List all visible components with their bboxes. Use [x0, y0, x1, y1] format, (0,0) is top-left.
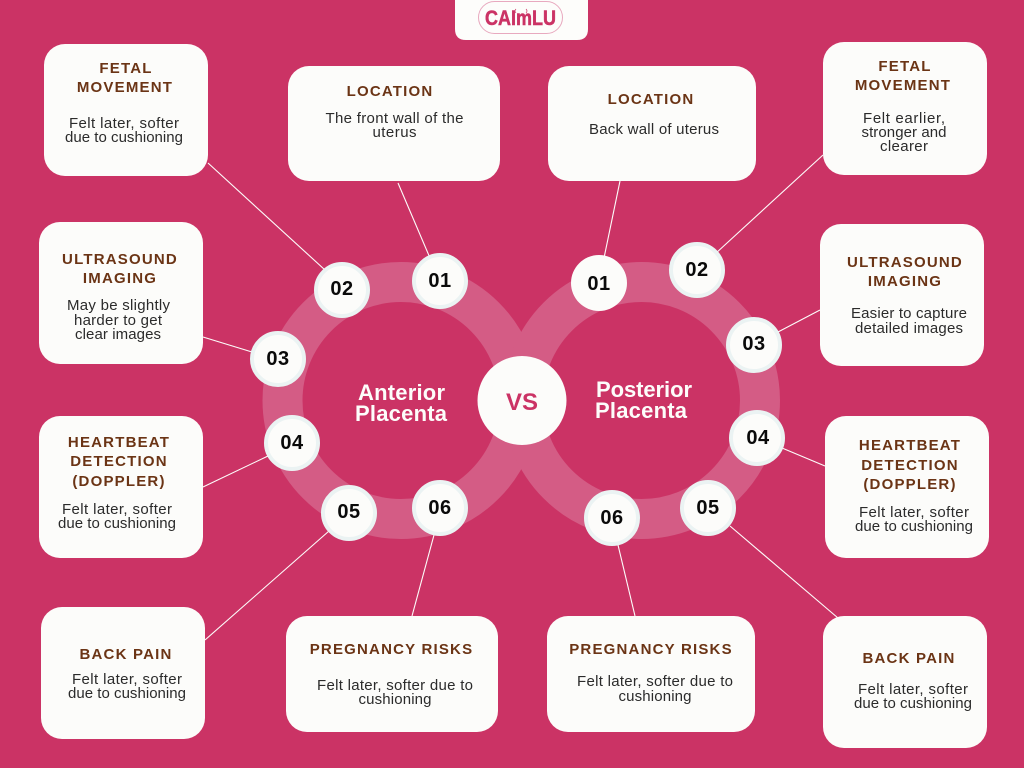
panel: posterior back pain: [823, 616, 987, 748]
panel: anterior fetal movement: MOVEMENT: [77, 79, 173, 96]
badge: anterior 02: 02: [330, 278, 354, 300]
panel: posterior location: [548, 66, 756, 181]
panel: anterior fetal movement: FETAL: [99, 60, 153, 77]
panel: anterior ultrasound imaging: harder to get: [74, 312, 163, 329]
infinity ring diagram: [282, 282, 760, 519]
badge: anterior 06: [414, 482, 466, 534]
panel: anterior fetal movement: Felt later, softer: [69, 115, 179, 132]
panel: posterior heartbeat detection: HEARTBEAT: [859, 437, 961, 454]
panel: posterior fetal movement: [823, 42, 987, 175]
panel: anterior pregnancy risks: cushioning: [358, 691, 432, 708]
heading: anterior placenta: Placenta: [355, 401, 448, 426]
panel: anterior back pain: [41, 607, 205, 739]
panel: posterior ultrasound imaging: [820, 224, 984, 366]
panel: anterior heartbeat detection: due to cushioning: [58, 515, 176, 532]
badge: posterior 06: [586, 492, 638, 544]
panel: anterior fetal movement: due to cushioning: [65, 129, 183, 146]
panel: posterior fetal movement: stronger and: [862, 124, 946, 141]
heading: posterior placenta: [595, 377, 692, 423]
logo: [455, 0, 588, 40]
panel: posterior back pain: due to cushioning: [854, 695, 972, 712]
panel: posterior fetal movement: MOVEMENT: [855, 77, 951, 94]
panel: anterior pregnancy risks: [286, 616, 498, 732]
panel: anterior fetal movement: [44, 44, 208, 176]
logo: CAImLU: [485, 7, 556, 30]
badge: anterior 06: 06: [428, 497, 452, 519]
badge: posterior 02: 02: [685, 259, 709, 281]
panel: posterior ultrasound imaging: ULTRASOUND: [847, 254, 963, 271]
badge: anterior 01: [414, 255, 466, 307]
badge: anterior 04: [266, 417, 318, 469]
panel: anterior ultrasound imaging: clear images: [75, 326, 161, 343]
panel: anterior heartbeat detection: Felt later, softer: [62, 501, 172, 518]
connector lines: [203, 155, 838, 640]
panel: posterior heartbeat detection: Felt later, softer: [859, 504, 969, 521]
badge: posterior 04: [731, 412, 783, 464]
panel: anterior back pain: BACK PAIN: [79, 646, 173, 663]
panel: posterior location: LOCATION: [608, 91, 694, 108]
panel: posterior heartbeat detection: (DOPPLER): [863, 476, 957, 493]
panel: posterior location: Back wall of uterus: [589, 121, 719, 138]
badge: anterior 05: 05: [337, 501, 361, 523]
panel: anterior ultrasound imaging: IMAGING: [83, 270, 157, 287]
badge: posterior 05: [682, 482, 734, 534]
panel: posterior heartbeat detection: [825, 416, 989, 558]
heading: posterior placenta: Placenta: [595, 398, 688, 423]
panel: anterior location: uterus: [372, 124, 416, 141]
panel: anterior back pain: Felt later, softer: [72, 671, 182, 688]
panel: posterior back pain: BACK PAIN: [862, 650, 956, 667]
badge: posterior 02: [671, 244, 723, 296]
panel: anterior ultrasound imaging: [39, 222, 203, 364]
panel: anterior location: The front wall of the: [326, 110, 464, 127]
badge: posterior 01: [571, 255, 627, 311]
panel: posterior ultrasound imaging: detailed images: [855, 320, 963, 337]
panel: posterior fetal movement: Felt earlier,: [863, 110, 945, 127]
heading: posterior placenta: Posterior: [596, 377, 692, 402]
panel: anterior back pain: due to cushioning: [68, 685, 186, 702]
panel: posterior pregnancy risks: [547, 616, 755, 732]
panel: posterior back pain: Felt later, softer: [858, 681, 968, 698]
badge: anterior 04: 04: [280, 432, 304, 454]
panel: anterior pregnancy risks: Felt later, softer due to: [317, 677, 473, 694]
panel: anterior ultrasound imaging: May be slightly: [67, 297, 170, 314]
panel: posterior pregnancy risks: cushioning: [618, 688, 692, 705]
heading: anterior placenta: Anterior: [358, 380, 445, 405]
panel: anterior heartbeat detection: HEARTBEAT: [68, 434, 170, 451]
vs badge: VS: [506, 389, 538, 416]
badge: posterior 04: 04: [746, 427, 770, 449]
panel: posterior ultrasound imaging: Easier to capture: [851, 305, 967, 322]
panel: anterior heartbeat detection: [39, 416, 203, 558]
badge: posterior 01: 01: [587, 273, 611, 295]
panel: posterior ultrasound imaging: IMAGING: [868, 273, 942, 290]
panel: posterior pregnancy risks: PREGNANCY RISKS: [569, 641, 733, 658]
panel: anterior ultrasound imaging: ULTRASOUND: [62, 251, 178, 268]
heading: anterior placenta: [355, 380, 448, 426]
panel: anterior location: LOCATION: [347, 83, 433, 100]
panel: posterior fetal movement: clearer: [880, 138, 928, 155]
badge: posterior 05: 05: [696, 497, 720, 519]
panel: posterior heartbeat detection: due to cushioning: [855, 518, 973, 535]
badge: anterior 02: [316, 264, 368, 316]
panel: posterior fetal movement: FETAL: [878, 58, 932, 75]
badge: posterior 06: 06: [600, 507, 624, 529]
badge: posterior 03: [728, 319, 780, 371]
panel: anterior heartbeat detection: DETECTION: [70, 453, 168, 470]
badge: anterior 03: 03: [266, 348, 290, 370]
panel: posterior heartbeat detection: DETECTION: [861, 457, 959, 474]
vs badge: [478, 356, 566, 445]
panel: anterior heartbeat detection: (DOPPLER): [72, 473, 166, 490]
badge: anterior 05: [323, 487, 375, 539]
badge: anterior 03: [252, 333, 304, 385]
badge: posterior 03: 03: [742, 333, 766, 355]
panel: anterior location: [288, 66, 500, 181]
panel: anterior pregnancy risks: PREGNANCY RISKS: [310, 641, 473, 658]
panel: posterior pregnancy risks: Felt later, softer due to: [577, 673, 733, 690]
badge: anterior 01: 01: [428, 270, 452, 292]
